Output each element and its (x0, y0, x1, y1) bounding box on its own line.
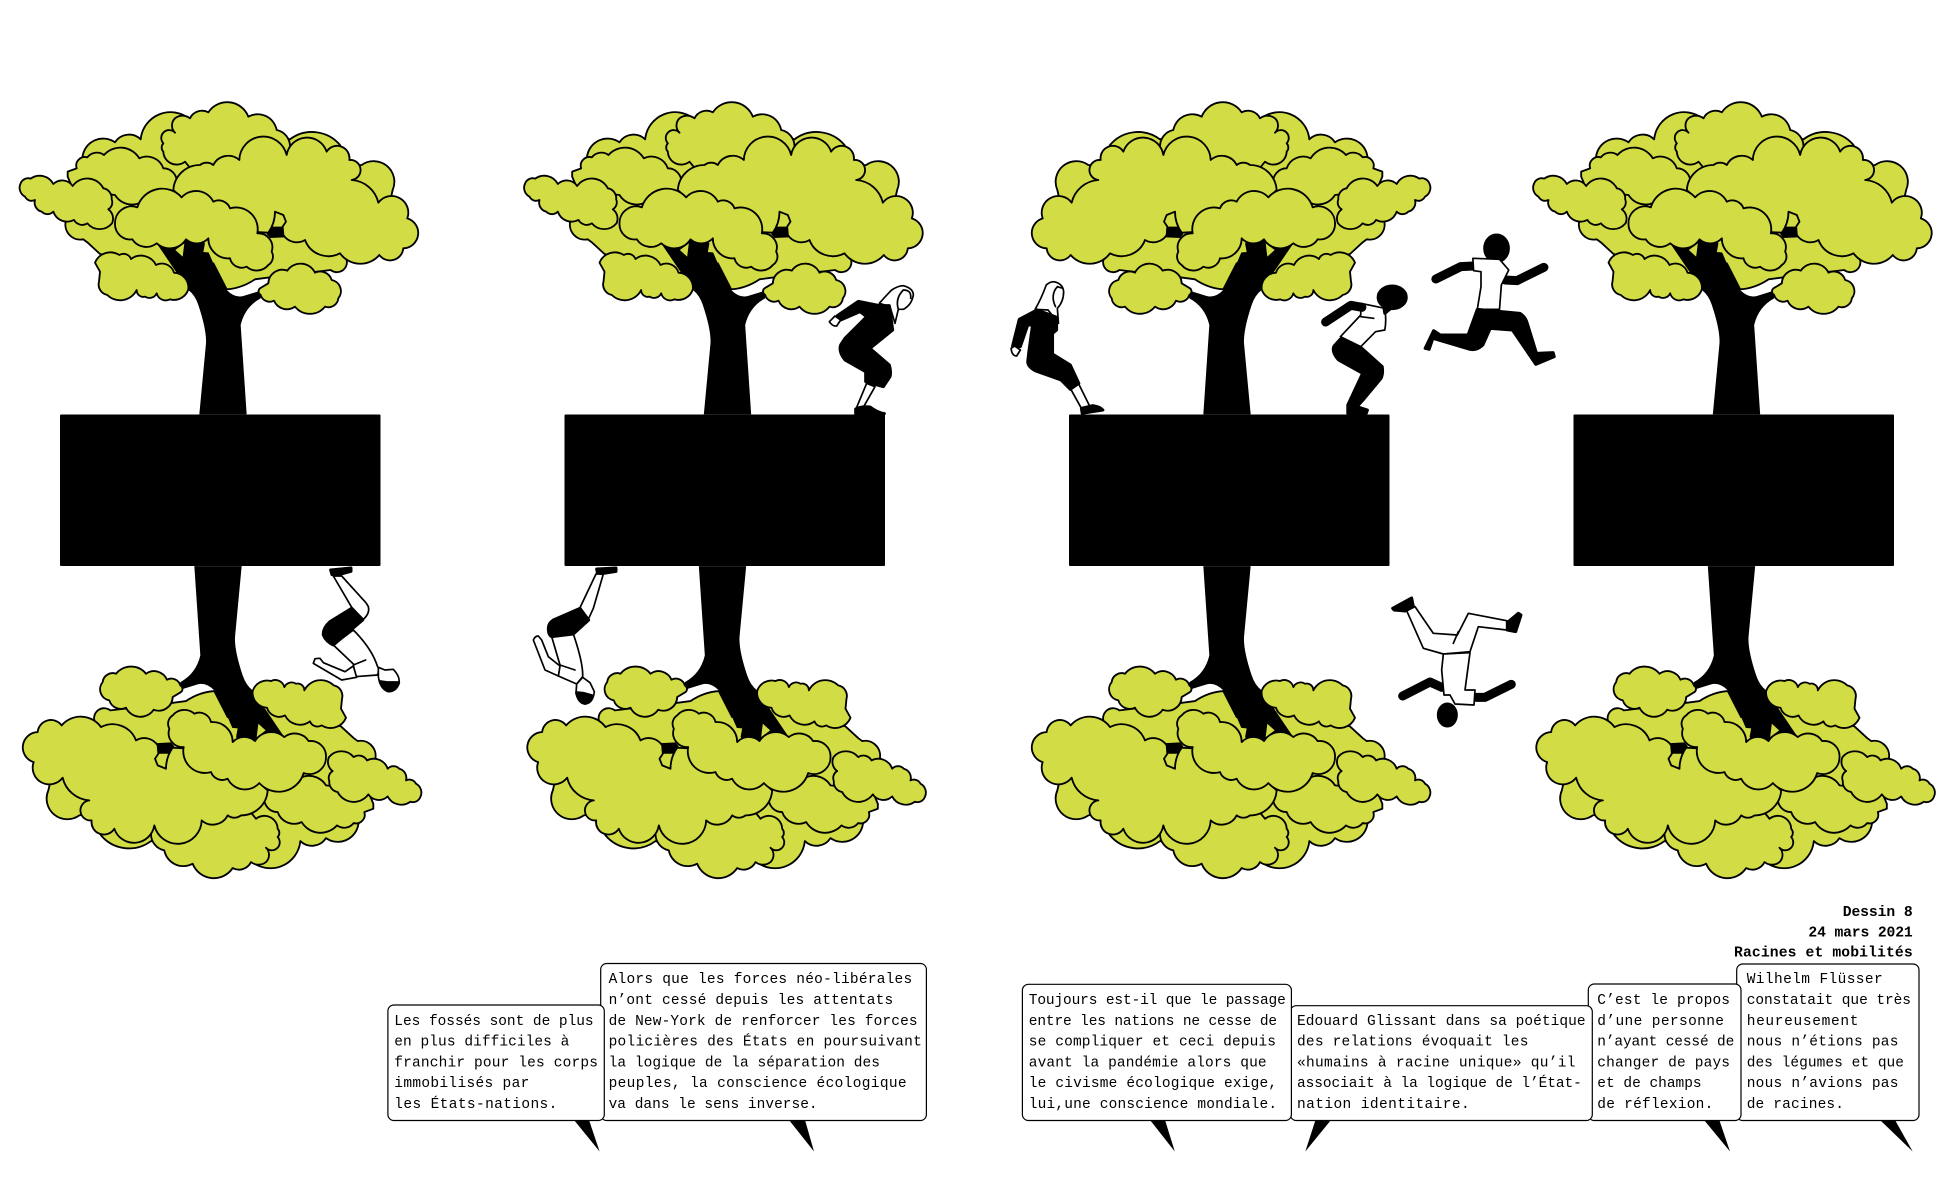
speech bubble 3: Toujours est-il: le civisme écologique exige, (1029, 1076, 1277, 1092)
speech bubble 6: Wilhelm Flüsser: de racines. (1747, 1097, 1844, 1113)
speech bubble 4: Edouard Glissant (1290, 1006, 1592, 1152)
speech bubble 5: C'est le propos: C’est le propos (1597, 993, 1730, 1009)
speech bubble 6: Wilhelm Flüsser: des légumes et que (1747, 1055, 1904, 1071)
figure: person in hijab jumping off left of block (1011, 282, 1103, 413)
speech bubble 1: fossés: Les fossés sont de plus (394, 1014, 594, 1030)
figure: person crouching on right of block (1326, 286, 1406, 413)
speech bubble 5: C'est le propos: n’ayant cessé de (1597, 1035, 1734, 1051)
speech bubble 2: néo-libérales: policières des États en poursuivant (609, 1033, 922, 1051)
speech bubble 4: Edouard Glissant: des relations évoquait les (1297, 1035, 1528, 1051)
roots and foliage: tree 4 bottom (1536, 566, 1935, 878)
speech bubble 2: néo-libérales: peuples, la conscience écologique (609, 1076, 907, 1092)
speech bubble 5: C'est le propos: de réflexion. (1597, 1097, 1713, 1113)
speech bubble 2: néo-libérales: la logique de la séparation des (609, 1055, 880, 1071)
panel: tree 1 (20, 102, 421, 878)
figure: person in hijab crouching on block, tree 2 (829, 286, 913, 414)
speech bubble 4: Edouard Glissant: nation identitaire. (1297, 1097, 1470, 1113)
panel: tree 3 (1011, 102, 1554, 878)
speech bubble 1: fossés: immobilisés par (394, 1076, 529, 1092)
black block: tree 1 (60, 414, 380, 566)
speech bubble 6: Wilhelm Flüsser: nous n’avions pas (1747, 1076, 1898, 1092)
black block: tree 2 (564, 414, 885, 566)
speech bubble 5: C'est le propos (1588, 984, 1741, 1152)
foliage and trunk: tree 1 top (20, 102, 418, 414)
speech bubble 3: Toujours est-il (1022, 984, 1291, 1152)
speech bubble 2: néo-libérales (601, 964, 926, 1152)
foliage and trunk: tree 4 top (1533, 102, 1932, 414)
speech bubble 1: fossés: franchir pour les corps (394, 1055, 598, 1071)
speech bubble 2: néo-libérales: va dans le sens inverse. (609, 1097, 818, 1113)
speech bubble 3: Toujours est-il: lui,une conscience mondiale. (1029, 1097, 1277, 1113)
speech bubble 6: Wilhelm Flüsser: Wilhelm Flüsser (1747, 972, 1883, 988)
speech bubble 6: Wilhelm Flüsser: constatait que très (1747, 993, 1911, 1009)
speech bubble 3: Toujours est-il: entre les nations ne cesse de (1029, 1014, 1277, 1030)
speech bubble 2: néo-libérales: de New-York de renforcer les forces (609, 1014, 918, 1030)
figure: person running in the air (1425, 235, 1554, 364)
speech bubble 5: C'est le propos: changer de pays (1597, 1055, 1730, 1071)
speech bubble 6: Wilhelm Flüsser: nous n’étions pas (1747, 1035, 1898, 1051)
black block: tree 3 (1069, 414, 1390, 566)
speech bubble 1: fossés: en plus difficiles à (394, 1035, 570, 1051)
figure: person upside down beneath block (1393, 598, 1521, 726)
speech bubble 5: C'est le propos: et de champs (1597, 1076, 1702, 1092)
speech bubble 3: Toujours est-il: Toujours est-il que le passage (1029, 993, 1286, 1009)
title block: Dessin 8: Racines et mobilités (1734, 946, 1913, 962)
panel: tree 2 (524, 102, 926, 878)
roots and foliage: tree 2 bottom (527, 566, 926, 878)
speech bubble 4: Edouard Glissant: «humains à racine unique» qu’il (1297, 1055, 1575, 1071)
speech bubble 5: C'est le propos: d’une personne (1597, 1014, 1724, 1030)
speech bubble 3: Toujours est-il: se compliquer et ceci depuis (1029, 1035, 1276, 1051)
speech bubble 2: néo-libérales: n’ont cessé depuis les attentats (609, 993, 893, 1009)
black block: tree 4 (1574, 414, 1894, 566)
title block: Dessin 8: 24 mars 2021 (1808, 926, 1913, 942)
panel: tree 4 (1533, 102, 1935, 878)
roots and foliage: tree 1 bottom (23, 566, 421, 878)
foliage and trunk: tree 3 top, mirrored (1032, 102, 1430, 414)
figure: person hanging under block, tree 1 (313, 568, 399, 692)
speech bubble 4: Edouard Glissant: associait à la logique de l’État- (1297, 1074, 1582, 1092)
speech bubble 1: fossés (388, 1005, 604, 1152)
title block: Dessin 8: Dessin 8 (1843, 905, 1913, 921)
speech bubble 6: Wilhelm Flüsser: heureusement (1747, 1014, 1858, 1030)
title block: Dessin 8 (1734, 905, 1913, 962)
speech bubble 3: Toujours est-il: avant la pandémie alors que (1029, 1055, 1267, 1071)
foliage and trunk: tree 2 top (524, 102, 923, 414)
speech bubble 6: Wilhelm Flüsser (1737, 964, 1919, 1152)
speech bubble 2: néo-libérales: Alors que les forces néo-libérales (609, 972, 912, 988)
speech bubble 4: Edouard Glissant: Edouard Glissant dans sa poétique (1297, 1014, 1586, 1030)
roots and foliage: tree 3 bottom (1032, 566, 1430, 878)
figure: person hanging under block, tree 2 (533, 568, 616, 704)
speech bubble 1: fossés: les États-nations. (394, 1095, 557, 1113)
